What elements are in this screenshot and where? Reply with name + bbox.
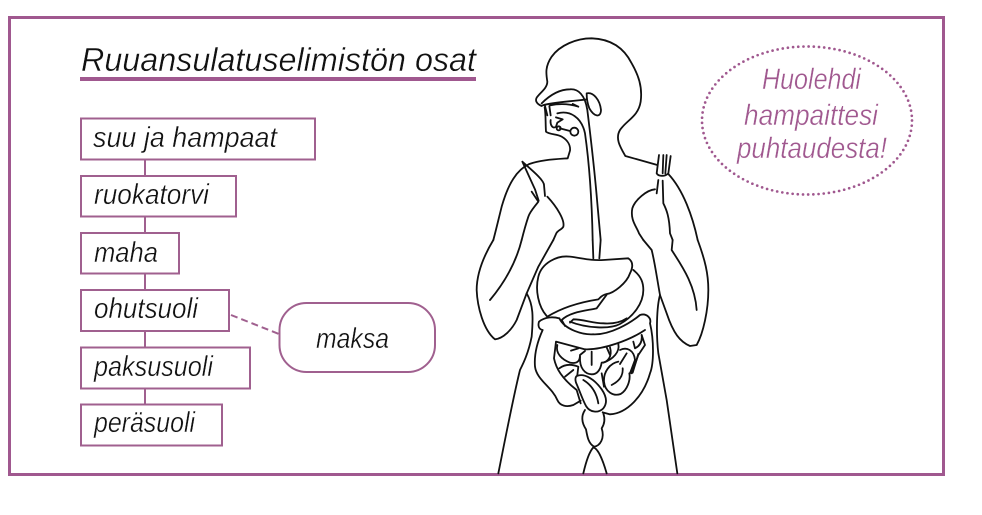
left hand with knife: [522, 162, 564, 240]
mouth and throat detail: [542, 89, 601, 240]
box: ruokatorvi: [81, 176, 236, 216]
dashed connector to maksa: [231, 315, 279, 334]
large intestine: [535, 314, 653, 414]
small intestine: [557, 335, 642, 412]
box: maha: maha: [94, 237, 158, 269]
box: suu ja hampaat: suu ja hampaat: [93, 122, 279, 154]
box: paksusuoli: paksusuoli: [93, 351, 214, 383]
right hand with fork: [632, 155, 698, 240]
box: maksa: [280, 303, 435, 372]
box: maksa: maksa: [316, 323, 389, 355]
box: ruokatorvi: ruokatorvi: [94, 179, 210, 211]
box: ohutsuoli: [81, 290, 229, 331]
box: ohutsuoli: ohutsuoli: [94, 293, 199, 325]
flow connector: [144, 159, 146, 404]
callout: dental care reminder: puhtaudesta!: [736, 132, 888, 165]
head and neck: [493, 38, 657, 240]
box: maha: [81, 233, 179, 274]
arms and torso: [477, 240, 708, 473]
box: peräsuoli: peräsuoli: [93, 407, 196, 439]
liver and stomach: [537, 256, 643, 327]
box: suu ja hampaat: [81, 118, 315, 160]
box: peräsuoli: [81, 404, 222, 446]
callout: dental care reminder: [702, 46, 912, 194]
box: paksusuoli: [81, 348, 250, 388]
callout: dental care reminder: Huolehdi: [762, 63, 862, 96]
title: Ruuansulatuselimistön osat: [81, 41, 478, 78]
illustration: human body with digestive system: [477, 38, 708, 473]
rectum and anus: [582, 410, 607, 473]
callout: dental care reminder: hampaittesi: [744, 99, 879, 132]
